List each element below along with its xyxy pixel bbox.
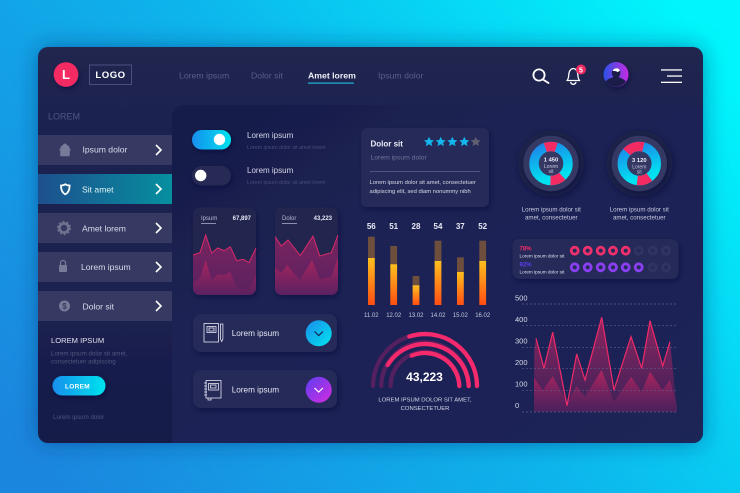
donut chart 1: sit [548, 169, 554, 175]
icon: star rating [424, 137, 481, 146]
toggle labels: Lorem ipsum [247, 131, 294, 140]
donut chart 1: 1 450 [544, 158, 558, 164]
bar chart [364, 222, 491, 319]
large area chart [515, 294, 677, 412]
accordion row 1 [193, 314, 337, 352]
top navigation: Amet lorem [308, 70, 356, 80]
top navigation: Lorem ipsum [179, 70, 229, 80]
toggle labels: Lorem ipsum dolor sit amet lorem [247, 180, 326, 186]
top navigation: Dolor sit [251, 70, 283, 80]
sidebar footer text: Lorem ipsum dolor [53, 414, 104, 421]
review card: Dolor sit [370, 140, 403, 148]
sidebar heading: LOREM [48, 112, 80, 122]
large area chart: 400 [515, 315, 528, 324]
mini area chart: Ipsum [193, 208, 256, 295]
bar chart: 16.02 [475, 313, 491, 319]
menu item: Sit amet: Sit amet [82, 184, 114, 194]
large area chart: 100 [515, 379, 528, 388]
top navigation: Ipsum dolor [378, 70, 423, 80]
donut chart 2: sit [637, 170, 642, 176]
sidebar menu [38, 135, 172, 321]
bar chart: 37 [456, 222, 465, 231]
menu item: Lorem ipsum [38, 252, 172, 282]
donut captions [522, 206, 669, 222]
bar chart: 52 [478, 222, 488, 231]
gauge caption: LOREM IPSUM DOLOR SIT AMET, [378, 398, 472, 404]
donut captions: Lorem ipsum dolor sit [522, 206, 581, 214]
progress rings card: 78% [520, 246, 532, 252]
mini area chart: Dolor: Dolor [282, 216, 296, 222]
icon: notebook with pen [204, 324, 223, 342]
large area chart: 300 [515, 336, 528, 345]
rings: row 2 [571, 264, 670, 271]
large area chart: 0 [515, 401, 519, 410]
donut chart 1: Lorem [544, 164, 558, 170]
menu item: Dolor sit: $ [62, 302, 67, 311]
top navigation [179, 70, 423, 84]
toggle labels: Lorem ipsum dolor sit amet lorem [247, 145, 326, 151]
progress rings card: 92% [520, 262, 532, 268]
sidebar promo text: Lorem ipsum dolor sit amet, [51, 351, 128, 358]
bar chart: 28 [412, 222, 421, 231]
icon: user avatar [604, 62, 628, 87]
gauge caption: CONSECTETUER [401, 406, 449, 412]
progress rings card [512, 239, 678, 279]
bar chart: 54 [434, 222, 443, 231]
menu item: Sit amet [38, 174, 172, 204]
menu item: Ipsum dolor: Ipsum dolor [82, 144, 128, 154]
review card: Lorem ipsum dolor sit amet, consectetuer [370, 180, 476, 186]
button: LOREM [52, 376, 106, 396]
icon: spiral notebook [204, 380, 221, 400]
bar chart: 15.02 [453, 313, 468, 319]
review card: adipiscing elit, sed diam nonummy nibh [370, 189, 471, 195]
icon: round logo: L [62, 67, 70, 82]
panel: dashboard window [38, 47, 703, 443]
bar chart: 12.02 [386, 313, 402, 319]
logo box [90, 65, 132, 84]
panel: main content area [172, 105, 703, 443]
review card [361, 128, 489, 207]
progress rings card: Lorem ipsum dolor sit [520, 254, 565, 258]
donut captions: Lorem ipsum dolor sit [610, 206, 669, 214]
progress rings card: Lorem ipsum dolor sit [520, 270, 565, 274]
accordion row 1: Lorem ipsum [232, 329, 279, 338]
rings: row 1 [571, 247, 670, 254]
sidebar promo text: consectetuer adipiscing [51, 359, 116, 366]
toggle on [192, 130, 231, 150]
donut chart 1 [518, 130, 584, 196]
button: LOREM: LOREM [65, 383, 90, 390]
menu item: Amet lorem: Amet lorem [82, 224, 126, 234]
bar chart: 14.02 [430, 313, 446, 319]
donut captions: amet, consectetuer [613, 214, 666, 222]
toggle labels: Lorem ipsum [247, 166, 294, 175]
mini area chart: Dolor [275, 208, 338, 295]
bar chart: 51 [389, 222, 399, 231]
icon: search [533, 69, 548, 83]
icon: bell with badge: 5 [579, 67, 583, 74]
logo box: LOGO [95, 70, 126, 81]
gauge caption [378, 398, 472, 412]
mini area chart: Ipsum: Ipsum [201, 216, 217, 222]
accordion row 2: Lorem ipsum [232, 386, 279, 394]
sidebar promo text: LOREM IPSUM [51, 336, 104, 345]
mini area chart: Dolor: 43,223 [314, 216, 333, 222]
bar chart: 13.02 [408, 313, 424, 319]
large area chart: 200 [515, 358, 528, 367]
bar chart: 11.02 [364, 313, 379, 319]
toggle labels [247, 131, 326, 186]
menu item: Amet lorem [38, 213, 172, 243]
accordion row 2 [193, 370, 337, 408]
donut chart 2: Lorem [632, 164, 646, 170]
menu item: Dolor sit [38, 291, 172, 321]
sidebar promo text [51, 336, 128, 366]
donut chart 2: 3 120 [632, 158, 647, 164]
icon: hamburger menu [661, 69, 682, 83]
icon: bell with badge [567, 64, 586, 84]
review card: Lorem ipsum dolor [370, 154, 428, 162]
menu item: Ipsum dolor [38, 135, 172, 165]
bar chart: 56 [367, 222, 376, 231]
menu item: Lorem ipsum: Lorem ipsum [81, 262, 131, 272]
toggle off [192, 166, 231, 186]
donut captions: amet, consectetuer [525, 214, 578, 222]
donut chart 2 [606, 130, 672, 196]
menu item: Dolor sit: Dolor sit [82, 302, 115, 312]
mini area chart: Ipsum: 67,897 [233, 216, 252, 222]
large area chart: 500 [515, 294, 528, 302]
radial gauge [373, 334, 477, 386]
icon: round logo [54, 62, 78, 87]
gauge value: 43,223 [406, 370, 443, 384]
